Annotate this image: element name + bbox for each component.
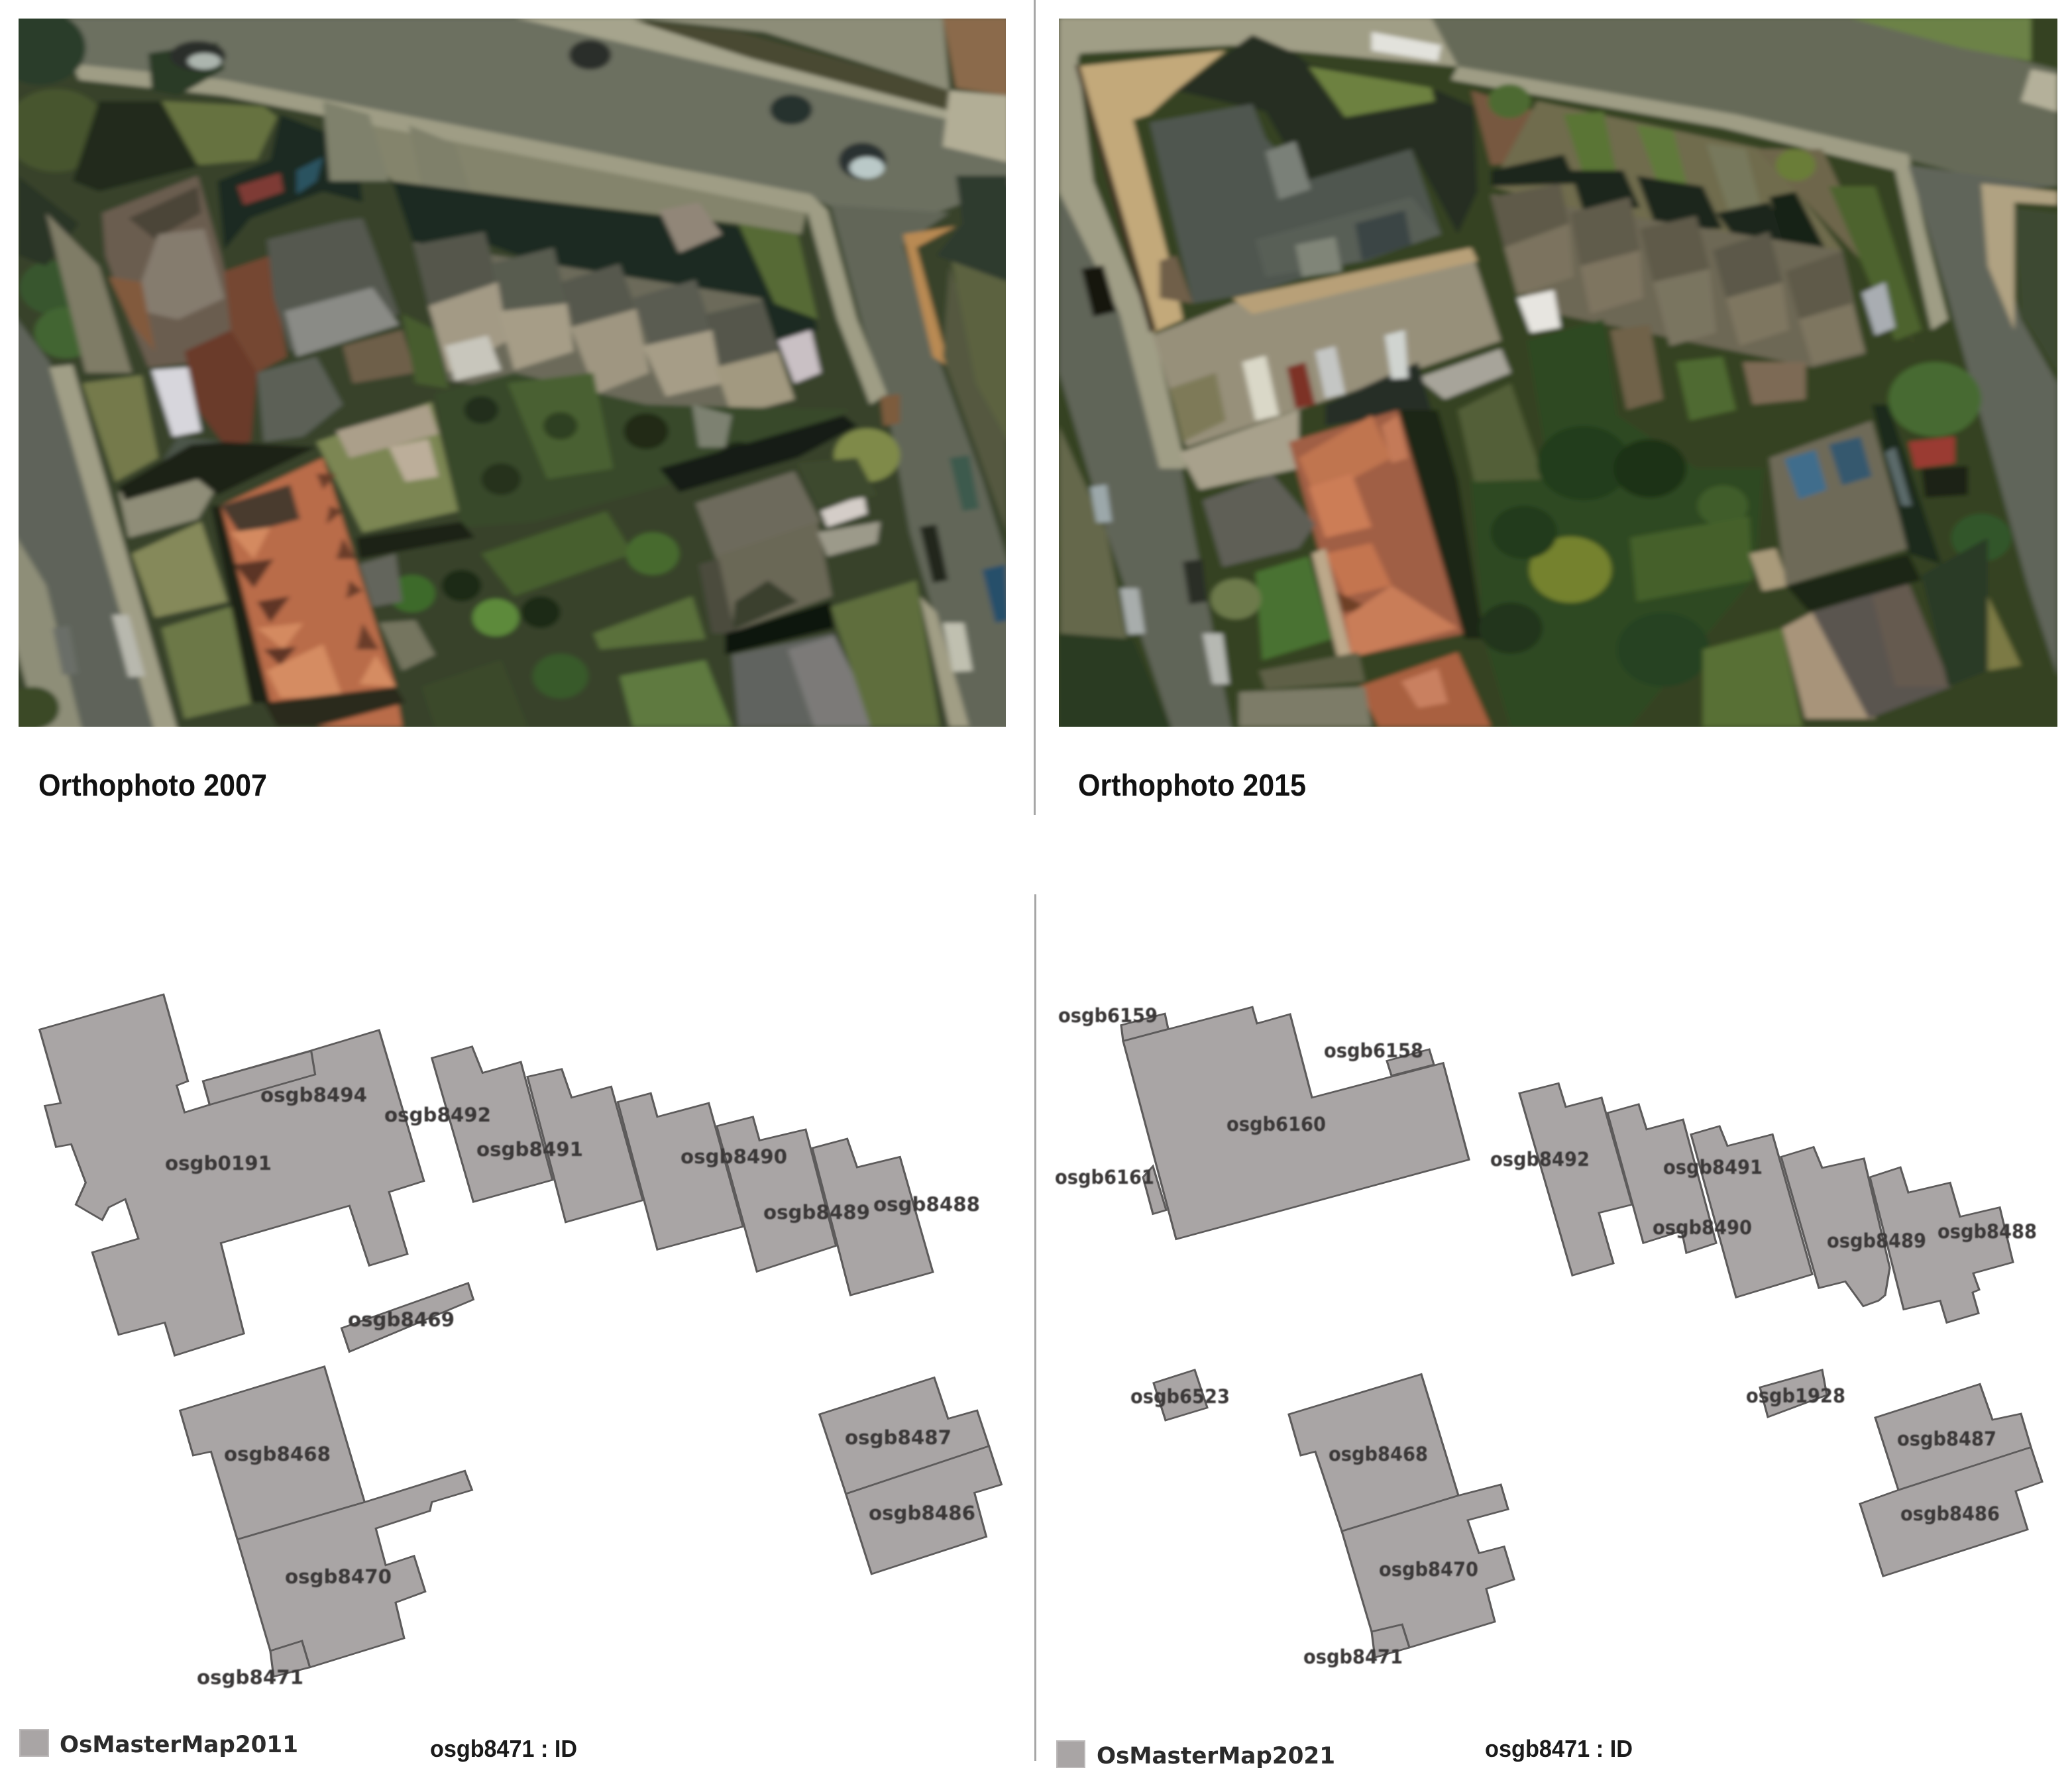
labels: 2011 building IDs: osgb8489 (763, 1201, 870, 1224)
legend: OsMasterMap2021: OsMasterMap2021 (1097, 1743, 1335, 1769)
labels: 2021 building IDs: osgb8486 (1900, 1502, 2000, 1525)
road: east street 2015 (1908, 165, 2057, 676)
front drives strip 2007 (371, 125, 808, 237)
labels: 2021 building IDs: osgb8490 (1653, 1216, 1752, 1239)
building: south-east pair roof 2007 (696, 471, 880, 727)
gardens: central green strip 2007 (389, 314, 900, 727)
labels: 2021 building IDs: osgb6158 (1324, 1039, 1423, 1062)
labels: 2021 building IDs (1055, 1004, 2037, 1668)
labels: 2011 building IDs: osgb8492 (384, 1104, 491, 1126)
house: semi-detached grey roof (267, 218, 399, 351)
courtyard paved (1153, 250, 1501, 447)
labels: 2021 building IDs: osgb6161 (1055, 1166, 1154, 1188)
building: new dark roof 2015 (1150, 104, 1441, 303)
road: top street 2007 (50, 18, 1015, 213)
divider: top vertical (1034, 0, 1036, 815)
building: roof with solar panels 2015 (1769, 405, 1941, 586)
house: north-west shadow and drive (72, 101, 204, 191)
labels: 2011 building IDs: osgb8468 (224, 1443, 331, 1465)
map: OS MasterMap 2011 building footprints (40, 994, 1001, 1677)
labels: 2021 building IDs: osgb8487 (1897, 1428, 1996, 1450)
caption: Orthophoto 2015: Orthophoto 2015 (1078, 768, 1306, 802)
labels: 2021 building IDs: osgb8471 (1303, 1646, 1403, 1668)
labels: 2011 building IDs: osgb8470 (285, 1565, 392, 1588)
building: red tile roof 2007 (221, 458, 406, 727)
grey roof and lawn 2015 (1203, 474, 1315, 567)
courtyard and lawn 2007 (317, 402, 459, 533)
legend: OsMasterMap2011: OsMasterMap2011 (60, 1732, 298, 1758)
divider: bottom vertical (1034, 894, 1036, 1761)
labels: 2021 building IDs: osgb8468 (1329, 1443, 1428, 1465)
labels: 2011 building IDs: osgb8487 (845, 1426, 952, 1449)
road: east street 2007 (831, 205, 1015, 732)
labels: 2011 building IDs: osgb8491 (476, 1138, 583, 1161)
building: new block shadow and lawn (1176, 34, 1478, 235)
labels: 2021 building IDs: osgb8491 (1663, 1156, 1763, 1179)
cars in courtyard (1081, 32, 1441, 719)
caption: Orthophoto 2007: Orthophoto 2007 (38, 768, 267, 802)
labels: 2021 building IDs: osgb6160 (1227, 1113, 1326, 1135)
labels: 2011 building IDs: osgb0191 (165, 1152, 272, 1175)
labels: 2021 building IDs: osgb8488 (1937, 1220, 2037, 1243)
labels: 2021 building IDs: osgb6159 (1058, 1004, 1158, 1027)
legend note: ID field 2021: osgb8471 : ID (1485, 1735, 1633, 1762)
road: top street 2015 (1431, 18, 2057, 186)
house row: terrace 2015 (1471, 84, 1922, 367)
labels: 2021 building IDs: osgb8489 (1827, 1230, 1926, 1252)
labels: 2021 building IDs: osgb8470 (1379, 1558, 1478, 1581)
labels: 2011 building IDs: osgb8471 (197, 1666, 303, 1689)
labels: 2011 building IDs (165, 1084, 980, 1689)
cars 2007 (53, 40, 1009, 677)
house row: terrace 2007 (392, 181, 821, 418)
road: west street 2007 (13, 314, 155, 732)
panel: orthophoto 2007 aerial image (0, 11, 1015, 732)
building: south-east bungalow 2015 (1782, 538, 2021, 719)
labels: 2021 building IDs: osgb6523 (1130, 1385, 1230, 1408)
labels: 2011 building IDs: osgb8494 (260, 1084, 367, 1106)
legend note: ID field 2011: osgb8471 : ID (430, 1735, 577, 1762)
building: red tile roof 2015 (1289, 410, 1491, 727)
labels: 2021 building IDs: osgb8492 (1490, 1148, 1590, 1171)
labels: 2011 building IDs: osgb8469 (348, 1308, 455, 1331)
house: west cluster roofs (102, 176, 237, 367)
panel: orthophoto 2015 aerial image (1050, 13, 2064, 732)
gravel yard (1077, 50, 1226, 333)
labels: 2011 building IDs: osgb8488 (873, 1193, 980, 1216)
map: OS MasterMap 2021 building footprints (1121, 1007, 2042, 1657)
labels: 2011 building IDs: osgb8486 (869, 1502, 975, 1524)
gardens: central greens 2015 (1458, 319, 2011, 727)
labels: 2021 building IDs: osgb1928 (1746, 1385, 1845, 1407)
road: west street 2015 (1059, 186, 1232, 732)
labels: 2011 building IDs: osgb8490 (681, 1145, 787, 1168)
